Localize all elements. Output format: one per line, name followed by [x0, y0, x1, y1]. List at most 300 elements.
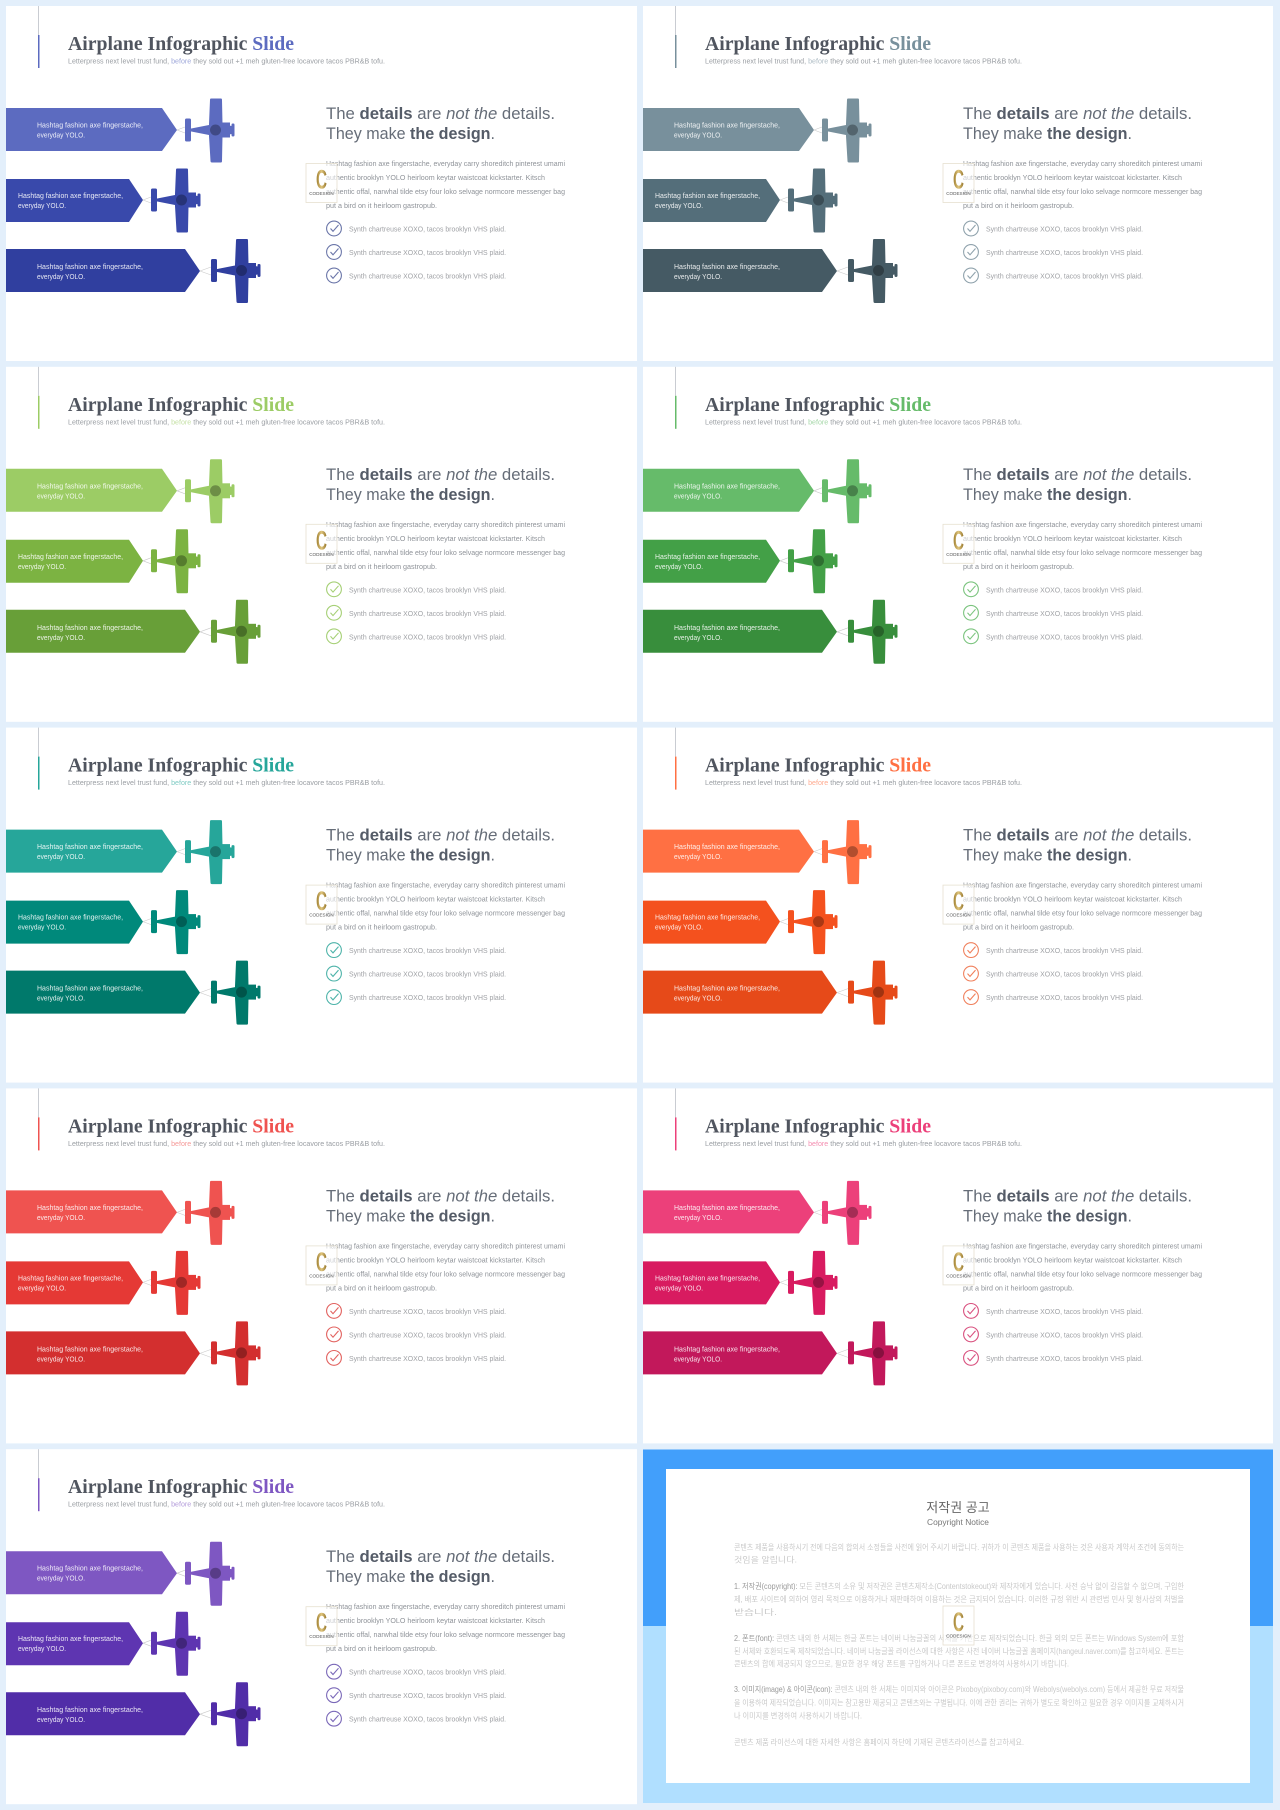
- body text: put a bird on it heirloom gastropub.: [326, 201, 437, 210]
- arrow label 1: Hashtag fashion axe fingerstache,: [37, 120, 143, 130]
- arrow label 1: [643, 830, 814, 873]
- body text: put a bird on it heirloom gastropub.: [963, 562, 1074, 571]
- body text: authentic brooklyn YOLO heirloom keytar waistcoat kickstarter. Kitsch: [326, 1616, 545, 1625]
- body text: Hashtag fashion axe fingerstache, everyday carry shoreditch pinterest umami: [963, 1241, 1202, 1250]
- arrow label 3: [6, 1331, 200, 1374]
- heading: The details are not the details.: [326, 826, 555, 845]
- check list: [327, 1304, 506, 1365]
- heading: [963, 465, 1192, 504]
- watermark: C: [316, 1247, 327, 1277]
- arrow label 1: Hashtag fashion axe fingerstache,: [37, 1203, 143, 1212]
- body text: authentic brooklyn YOLO heirloom keytar waistcoat kickstarter. Kitsch: [963, 895, 1182, 904]
- airplane 1: [814, 1181, 872, 1245]
- check list: Synth chartreuse XOXO, tacos brooklyn VHS plaid.: [349, 248, 506, 257]
- arrow label 1: Hashtag fashion axe fingerstache,: [674, 481, 780, 490]
- arrow label 1: everyday YOLO.: [37, 1574, 85, 1583]
- heading: The details are not the details.: [326, 1186, 555, 1205]
- check list: Synth chartreuse XOXO, tacos brooklyn VHS plaid.: [986, 1354, 1143, 1363]
- heading: They make the design.: [963, 1206, 1132, 1225]
- body text: Hashtag fashion axe fingerstache, everyday carry shoreditch pinterest umami: [326, 881, 565, 890]
- check list: Synth chartreuse XOXO, tacos brooklyn VHS plaid.: [986, 1330, 1143, 1339]
- heading: The details are not the details.: [326, 465, 555, 484]
- check list: Synth chartreuse XOXO, tacos brooklyn VHS plaid.: [349, 1354, 506, 1363]
- title: Airplane Infographic Slide: [68, 755, 294, 777]
- accent bar: [675, 6, 676, 68]
- body text: put a bird on it heirloom gastropub.: [963, 1283, 1074, 1292]
- panel: copyright notice: [643, 1450, 1273, 1803]
- panel: indigo slide: [6, 6, 637, 361]
- copyright heading: Copyright Notice: [927, 1517, 989, 1527]
- arrow label 1: Hashtag fashion axe fingerstache,: [674, 120, 780, 130]
- subtitle: Letterpress next level trust fund, before they sold out +1 meh gluten-free locavore tacos PBR&B tofu.: [68, 1139, 385, 1148]
- accent bar: [675, 1088, 676, 1150]
- arrow label 1: [6, 1190, 177, 1233]
- arrow label 3: Hashtag fashion axe fingerstache,: [674, 262, 780, 271]
- subtitle: Letterpress next level trust fund, before they sold out +1 meh gluten-free locavore tacos PBR&B tofu.: [68, 778, 385, 787]
- check list: Synth chartreuse XOXO, tacos brooklyn VHS plaid.: [986, 585, 1143, 594]
- body text: authentic brooklyn YOLO heirloom keytar waistcoat kickstarter. Kitsch: [326, 895, 545, 904]
- panel: pink slide: [643, 1088, 1273, 1443]
- arrow label 1: everyday YOLO.: [674, 130, 722, 140]
- heading: They make the design.: [326, 124, 495, 143]
- title: Airplane Infographic Slide: [705, 33, 931, 55]
- airplane 3: [200, 1321, 260, 1385]
- body text: [326, 1602, 565, 1653]
- copyright clause 3: 을 이용하여 제작되었습니다. 이미지는 참고용만 제공되고 콘텐츠와는 구별됩니다. 이에 관한 권리는 귀하가 별도로 확인하고 필요한 경우 이미지를 교체하시거: [734, 1698, 1184, 1708]
- watermark: [943, 1606, 974, 1645]
- check list: [327, 221, 506, 283]
- panel: green slide: [643, 367, 1273, 722]
- heading: [326, 104, 555, 143]
- heading: [326, 1186, 555, 1225]
- copyright intro: 콘텐츠 제품을 사용하시기 전에 다음의 합의서 소정들을 사전에 읽어 주시기 바랍니다. 귀하가 이 콘텐츠 제품을 사용하는 것은 사용자 계약서 조건에 동의하는: [734, 1542, 1184, 1552]
- panel: blue grey slide: [643, 6, 1273, 361]
- body text: put a bird on it heirloom gastropub.: [963, 923, 1074, 932]
- arrow label 2: [643, 179, 780, 222]
- heading: [963, 104, 1192, 143]
- panel: red slide: [6, 1088, 637, 1443]
- copyright intro: 것임을 알립니다.: [734, 1554, 797, 1564]
- watermark: CODESIGN: [309, 191, 334, 196]
- heading: The details are not the details.: [963, 826, 1192, 845]
- arrow label 3: everyday YOLO.: [37, 272, 85, 281]
- check list: Synth chartreuse XOXO, tacos brooklyn VHS plaid.: [986, 248, 1143, 257]
- copyright clause 1: 받습니다.: [734, 1607, 777, 1617]
- check list: [327, 943, 506, 1004]
- arrow label 1: everyday YOLO.: [674, 491, 722, 500]
- airplane 1: [177, 98, 234, 162]
- heading: They make the design.: [963, 485, 1132, 504]
- body text: authentic offal, narwhal tilde etsy four loko selvage normcore messenger bag: [326, 187, 565, 196]
- watermark: CODESIGN: [946, 552, 971, 557]
- heading: They make the design.: [963, 846, 1132, 865]
- airplane 3: [837, 1321, 898, 1385]
- accent bar: [38, 1449, 40, 1511]
- airplane 2: [143, 1612, 200, 1676]
- airplane 1: [177, 1181, 234, 1245]
- panel: light green slide: [6, 367, 637, 722]
- arrow label 1: Hashtag fashion axe fingerstache,: [37, 842, 143, 851]
- arrow label 2: everyday YOLO.: [18, 562, 66, 571]
- check list: [964, 943, 1143, 1004]
- arrow label 2: [6, 179, 143, 222]
- arrow label 2: everyday YOLO.: [655, 201, 703, 210]
- check list: Synth chartreuse XOXO, tacos brooklyn VHS plaid.: [986, 609, 1143, 618]
- heading: The details are not the details.: [963, 104, 1192, 123]
- arrow label 2: [6, 1622, 143, 1665]
- arrow label 2: [643, 1261, 780, 1304]
- body text: put a bird on it heirloom gastropub.: [326, 1283, 437, 1292]
- copyright heading: 저작권 공고: [926, 1500, 990, 1515]
- arrow label 1: Hashtag fashion axe fingerstache,: [37, 1564, 143, 1573]
- check list: Synth chartreuse XOXO, tacos brooklyn VHS plaid.: [349, 946, 506, 955]
- body text: authentic offal, narwhal tilde etsy four loko selvage normcore messenger bag: [326, 1269, 565, 1278]
- heading: They make the design.: [963, 124, 1132, 143]
- title: Airplane Infographic Slide: [68, 1115, 294, 1137]
- subtitle: Letterpress next level trust fund, before they sold out +1 meh gluten-free locavore tacos PBR&B tofu.: [68, 417, 385, 426]
- airplane 1: [177, 820, 234, 884]
- arrow label 3: [643, 1331, 837, 1374]
- heading: The details are not the details.: [963, 1186, 1192, 1205]
- body text: authentic brooklyn YOLO heirloom keytar waistcoat kickstarter. Kitsch: [326, 1255, 545, 1264]
- copyright clause 2: 콘텐츠의 합에 제공되지 않으므로, 필요한 경우 해당 폰트를 구입하거나 다른 폰트로 변경하여 사용하시기 바랍니다.: [734, 1658, 1069, 1668]
- watermark: C: [953, 164, 964, 194]
- watermark: CODESIGN: [309, 1273, 334, 1278]
- watermark: C: [953, 886, 964, 916]
- body text: [963, 881, 1202, 932]
- arrow label 1: Hashtag fashion axe fingerstache,: [674, 842, 780, 851]
- arrow label 2: Hashtag fashion axe fingerstache,: [655, 191, 760, 200]
- heading: [326, 1547, 555, 1586]
- arrow label 2: [643, 901, 780, 944]
- airplane 1: [814, 459, 872, 523]
- panel: teal slide: [6, 728, 637, 1083]
- arrow label 3: everyday YOLO.: [674, 1354, 722, 1363]
- check list: Synth chartreuse XOXO, tacos brooklyn VHS plaid.: [349, 1668, 506, 1677]
- subtitle: Letterpress next level trust fund, before they sold out +1 meh gluten-free locavore tacos PBR&B tofu.: [705, 778, 1022, 787]
- arrow label 2: Hashtag fashion axe fingerstache,: [655, 552, 760, 561]
- subtitle: Letterpress next level trust fund, before they sold out +1 meh gluten-free locavore tacos PBR&B tofu.: [705, 56, 1022, 66]
- airplane 3: [200, 600, 260, 664]
- airplane 1: [814, 98, 872, 162]
- arrow label 2: Hashtag fashion axe fingerstache,: [18, 552, 123, 561]
- body text: Hashtag fashion axe fingerstache, everyday carry shoreditch pinterest umami: [326, 1602, 565, 1611]
- copyright clause 1: 1. 저작권(copyright): 모든 콘텐츠의 소유 및 저작권은 콘텐츠제작소(Contentstokeout)와 제작자에게 있습니다. 사전 승낙 없이 갈음할 수 없으며, 구입한: [734, 1581, 1185, 1591]
- watermark: [943, 524, 974, 563]
- watermark: C: [316, 886, 327, 916]
- body text: Hashtag fashion axe fingerstache, everyday carry shoreditch pinterest umami: [326, 1241, 565, 1250]
- copyright heading: [926, 1500, 990, 1527]
- arrow label 3: Hashtag fashion axe fingerstache,: [674, 623, 780, 632]
- check list: Synth chartreuse XOXO, tacos brooklyn VHS plaid.: [349, 632, 506, 641]
- title: Airplane Infographic Slide: [68, 1476, 294, 1498]
- arrow label 2: [6, 1261, 143, 1304]
- watermark: CODESIGN: [309, 1634, 334, 1639]
- check list: [964, 1304, 1143, 1365]
- subtitle: Letterpress next level trust fund, before they sold out +1 meh gluten-free locavore tacos PBR&B tofu.: [705, 417, 1022, 426]
- heading: They make the design.: [326, 485, 495, 504]
- arrow label 2: everyday YOLO.: [655, 1283, 703, 1292]
- arrow label 3: Hashtag fashion axe fingerstache,: [37, 984, 143, 993]
- arrow label 3: [643, 249, 837, 292]
- arrow label 1: [6, 469, 177, 512]
- arrow label 3: [643, 971, 837, 1014]
- arrow label 1: everyday YOLO.: [674, 852, 722, 861]
- watermark: [306, 1607, 337, 1646]
- body text: authentic brooklyn YOLO heirloom keytar waistcoat kickstarter. Kitsch: [326, 173, 545, 182]
- airplane 3: [837, 239, 898, 303]
- heading: [963, 1186, 1192, 1225]
- check list: Synth chartreuse XOXO, tacos brooklyn VHS plaid.: [349, 1330, 506, 1339]
- airplane 3: [200, 961, 260, 1025]
- body text: authentic brooklyn YOLO heirloom keytar waistcoat kickstarter. Kitsch: [963, 1255, 1182, 1264]
- arrow label 3: everyday YOLO.: [37, 633, 85, 642]
- arrow label 3: everyday YOLO.: [37, 1354, 85, 1363]
- check list: Synth chartreuse XOXO, tacos brooklyn VHS plaid.: [349, 272, 506, 280]
- arrow label 3: Hashtag fashion axe fingerstache,: [674, 1344, 780, 1353]
- watermark: CODESIGN: [946, 913, 971, 918]
- watermark: CODESIGN: [946, 191, 971, 196]
- watermark: C: [316, 164, 327, 194]
- check list: [327, 582, 506, 644]
- body text: authentic offal, narwhal tilde etsy four loko selvage normcore messenger bag: [326, 548, 565, 557]
- title: Airplane Infographic Slide: [68, 394, 294, 416]
- check list: [964, 221, 1143, 283]
- copyright clause 2: [734, 1633, 1185, 1668]
- arrow label 2: [6, 901, 143, 944]
- body text: authentic offal, narwhal tilde etsy four loko selvage normcore messenger bag: [963, 548, 1202, 557]
- airplane 3: [200, 1682, 260, 1746]
- subtitle: Letterpress next level trust fund, before they sold out +1 meh gluten-free locavore tacos PBR&B tofu.: [705, 1139, 1022, 1148]
- accent bar: [38, 367, 40, 429]
- watermark: C: [316, 1608, 327, 1638]
- arrow label 3: everyday YOLO.: [37, 1715, 85, 1724]
- arrow label 2: everyday YOLO.: [655, 923, 703, 932]
- airplane 2: [143, 529, 200, 593]
- body text: Hashtag fashion axe fingerstache, everyday carry shoreditch pinterest umami: [326, 520, 565, 529]
- arrow label 1: everyday YOLO.: [674, 1213, 722, 1222]
- arrow label 2: Hashtag fashion axe fingerstache,: [18, 191, 123, 200]
- arrow label 2: Hashtag fashion axe fingerstache,: [18, 1634, 123, 1643]
- title: Airplane Infographic Slide: [68, 33, 294, 55]
- body text: authentic brooklyn YOLO heirloom keytar waistcoat kickstarter. Kitsch: [963, 173, 1182, 182]
- arrow label 2: everyday YOLO.: [18, 923, 66, 932]
- body text: [963, 520, 1202, 571]
- arrow label 1: Hashtag fashion axe fingerstache,: [37, 481, 143, 490]
- arrow label 2: Hashtag fashion axe fingerstache,: [655, 1273, 760, 1282]
- body text: Hashtag fashion axe fingerstache, everyday carry shoreditch pinterest umami: [963, 881, 1202, 890]
- watermark: [306, 1246, 337, 1285]
- watermark: C: [316, 525, 327, 555]
- panel: deep orange slide: [643, 728, 1273, 1083]
- arrow label 3: [6, 1692, 200, 1735]
- airplane 3: [837, 600, 898, 664]
- heading: They make the design.: [326, 1567, 495, 1586]
- check list: Synth chartreuse XOXO, tacos brooklyn VHS plaid.: [349, 585, 506, 594]
- body text: put a bird on it heirloom gastropub.: [326, 1644, 437, 1653]
- check list: Synth chartreuse XOXO, tacos brooklyn VHS plaid.: [349, 224, 506, 234]
- title: Airplane Infographic Slide: [705, 394, 931, 416]
- arrow label 3: Hashtag fashion axe fingerstache,: [37, 623, 143, 632]
- check list: Synth chartreuse XOXO, tacos brooklyn VHS plaid.: [986, 632, 1143, 641]
- arrow label 3: everyday YOLO.: [37, 994, 85, 1003]
- heading: The details are not the details.: [326, 1547, 555, 1566]
- heading: They make the design.: [326, 1206, 495, 1225]
- arrow label 3: [6, 971, 200, 1014]
- arrow label 3: [6, 610, 200, 653]
- copyright clause 2: 2. 폰트(font): 콘텐츠 내의 한 서체는 한글 폰트는 네이버 나눔글꼴의 서체를 기반으로 제작되었습니다. 한글 외의 모든 폰트는 Windows System에 포함: [734, 1633, 1185, 1643]
- check list: [327, 1664, 506, 1726]
- accent bar: [38, 6, 40, 68]
- body text: Hashtag fashion axe fingerstache, everyday carry shoreditch pinterest umami: [963, 520, 1202, 529]
- body text: [963, 159, 1202, 210]
- arrow label 3: Hashtag fashion axe fingerstache,: [37, 1344, 143, 1353]
- arrow label 1: everyday YOLO.: [37, 852, 85, 861]
- heading: [326, 465, 555, 504]
- copyright closing: 콘텐츠 제품 라이선스에 대한 자세한 사항은 홈페이지 하단에 기재된 콘텐츠라이선스를 참고하세요.: [734, 1737, 1024, 1747]
- watermark: C: [953, 525, 964, 555]
- check list: Synth chartreuse XOXO, tacos brooklyn VHS plaid.: [986, 272, 1143, 280]
- body text: [326, 881, 565, 932]
- check list: Synth chartreuse XOXO, tacos brooklyn VHS plaid.: [349, 609, 506, 618]
- arrow label 1: [6, 108, 177, 151]
- check list: Synth chartreuse XOXO, tacos brooklyn VHS plaid.: [986, 224, 1143, 234]
- arrow label 3: [643, 610, 837, 653]
- arrow label 2: everyday YOLO.: [655, 562, 703, 571]
- body text: authentic offal, narwhal tilde etsy four loko selvage normcore messenger bag: [326, 909, 565, 918]
- body text: authentic offal, narwhal tilde etsy four loko selvage normcore messenger bag: [963, 1269, 1202, 1278]
- accent bar: [38, 1088, 40, 1150]
- arrow label 2: [643, 540, 780, 583]
- arrow label 3: everyday YOLO.: [674, 633, 722, 642]
- body text: authentic offal, narwhal tilde etsy four loko selvage normcore messenger bag: [326, 1630, 565, 1639]
- watermark: [306, 885, 337, 924]
- watermark: C: [953, 1607, 964, 1637]
- airplane 2: [143, 1251, 200, 1315]
- watermark: C: [953, 1247, 964, 1277]
- arrow label 3: everyday YOLO.: [674, 272, 722, 281]
- watermark: CODESIGN: [946, 1273, 971, 1278]
- check list: Synth chartreuse XOXO, tacos brooklyn VHS plaid.: [349, 970, 506, 979]
- copyright clause 3: [734, 1684, 1184, 1720]
- airplane 3: [200, 239, 260, 303]
- arrow label 1: [6, 830, 177, 873]
- airplane 1: [177, 1542, 234, 1606]
- check list: Synth chartreuse XOXO, tacos brooklyn VHS plaid.: [986, 946, 1143, 955]
- airplane 3: [837, 961, 898, 1025]
- heading: The details are not the details.: [963, 465, 1192, 484]
- arrow label 2: everyday YOLO.: [18, 1283, 66, 1292]
- watermark: [306, 164, 337, 202]
- accent bar: [675, 367, 676, 429]
- arrow label 2: everyday YOLO.: [18, 201, 66, 210]
- heading: [963, 826, 1192, 865]
- check list: Synth chartreuse XOXO, tacos brooklyn VHS plaid.: [986, 1307, 1143, 1316]
- body text: authentic offal, narwhal tilde etsy four loko selvage normcore messenger bag: [963, 909, 1202, 918]
- panel: deep purple slide: [6, 1449, 637, 1804]
- airplane 1: [814, 820, 872, 884]
- watermark: [943, 1246, 974, 1285]
- check list: [964, 582, 1143, 644]
- check list: Synth chartreuse XOXO, tacos brooklyn VHS plaid.: [349, 1307, 506, 1316]
- body text: [326, 520, 565, 571]
- accent bar: [675, 728, 676, 790]
- copyright clause 1: 제, 배포 사이트에 의하여 영리 목적으로 이용하거나 재판매하여 이용하는 것은 금지되어 있습니다. 이러한 규정 위반 시 관련법 민사 및 형사상의 처벌을: [734, 1594, 1184, 1604]
- title: Airplane Infographic Slide: [705, 1115, 931, 1137]
- body text: [326, 159, 565, 210]
- copyright intro: [734, 1542, 1184, 1564]
- heading: They make the design.: [326, 846, 495, 865]
- arrow label 3: Hashtag fashion axe fingerstache,: [37, 1705, 143, 1714]
- body text: Hashtag fashion axe fingerstache, everyday carry shoreditch pinterest umami: [326, 159, 565, 168]
- check list: Synth chartreuse XOXO, tacos brooklyn VHS plaid.: [986, 970, 1143, 979]
- heading: The details are not the details.: [326, 104, 555, 123]
- arrow label 2: [6, 540, 143, 583]
- arrow label 2: everyday YOLO.: [18, 1644, 66, 1653]
- copyright clause 3: 나 이미지를 변경하여 사용하시기 바랍니다.: [734, 1710, 862, 1720]
- arrow label 2: Hashtag fashion axe fingerstache,: [18, 913, 123, 922]
- copyright clause 1: [734, 1581, 1185, 1617]
- check list: Synth chartreuse XOXO, tacos brooklyn VHS plaid.: [349, 1715, 506, 1724]
- watermark: [306, 524, 337, 563]
- body text: authentic offal, narwhal tilde etsy four loko selvage normcore messenger bag: [963, 187, 1202, 196]
- body text: put a bird on it heirloom gastropub.: [963, 201, 1074, 210]
- body text: Hashtag fashion axe fingerstache, everyday carry shoreditch pinterest umami: [963, 159, 1202, 168]
- airplane 1: [177, 459, 234, 523]
- airplane 2: [780, 529, 838, 593]
- body text: put a bird on it heirloom gastropub.: [326, 923, 437, 932]
- arrow label 1: [643, 1190, 814, 1233]
- body text: authentic brooklyn YOLO heirloom keytar waistcoat kickstarter. Kitsch: [326, 534, 545, 543]
- arrow label 1: [643, 108, 814, 151]
- body text: [963, 1241, 1202, 1292]
- copyright clause 3: 3. 이미지(image) & 아이콘(icon): 콘텐츠 내의 한 서체는 이미지와 아이콘은 Pixoboy(pixoboy.com)와 Webolys(webolys.com) 등에서 제공한 무료 저작물: [734, 1684, 1184, 1694]
- body text: [326, 1241, 565, 1292]
- arrow label 2: Hashtag fashion axe fingerstache,: [18, 1273, 123, 1282]
- copyright clause 2: 된 서체와 호환되도록 제작되었습니다. 네이버 나눔글꼴 라이선스에 대한 사항은 사전 네이버 나눔글꼴 홈페이지(hangeul.naver.com)를 참고하세요. 폰트는: [734, 1646, 1184, 1656]
- arrow label 3: Hashtag fashion axe fingerstache,: [37, 262, 143, 271]
- arrow label 1: everyday YOLO.: [37, 1213, 85, 1222]
- watermark: CODESIGN: [946, 1634, 971, 1638]
- arrow label 3: Hashtag fashion axe fingerstache,: [674, 984, 780, 993]
- check list: Synth chartreuse XOXO, tacos brooklyn VHS plaid.: [349, 1691, 506, 1700]
- arrow label 1: [6, 1551, 177, 1594]
- arrow label 3: [6, 249, 200, 292]
- airplane 2: [143, 890, 200, 954]
- arrow label 1: everyday YOLO.: [37, 130, 85, 140]
- airplane 2: [780, 890, 838, 954]
- watermark: [943, 164, 974, 202]
- arrow label 1: [643, 469, 814, 512]
- airplane 2: [780, 168, 838, 232]
- heading: [326, 826, 555, 865]
- accent bar: [38, 728, 40, 790]
- subtitle: Letterpress next level trust fund, before they sold out +1 meh gluten-free locavore tacos PBR&B tofu.: [68, 56, 385, 66]
- arrow label 1: Hashtag fashion axe fingerstache,: [674, 1203, 780, 1212]
- watermark: [943, 885, 974, 924]
- check list: Synth chartreuse XOXO, tacos brooklyn VHS plaid.: [349, 993, 506, 1002]
- airplane 2: [143, 168, 200, 232]
- body text: put a bird on it heirloom gastropub.: [326, 562, 437, 571]
- body text: authentic brooklyn YOLO heirloom keytar waistcoat kickstarter. Kitsch: [963, 534, 1182, 543]
- check list: Synth chartreuse XOXO, tacos brooklyn VHS plaid.: [986, 993, 1143, 1002]
- arrow label 3: everyday YOLO.: [674, 994, 722, 1003]
- subtitle: Letterpress next level trust fund, before they sold out +1 meh gluten-free locavore tacos PBR&B tofu.: [68, 1500, 385, 1509]
- airplane 2: [780, 1251, 838, 1315]
- arrow label 2: Hashtag fashion axe fingerstache,: [655, 913, 760, 922]
- arrow label 1: everyday YOLO.: [37, 491, 85, 500]
- watermark: CODESIGN: [309, 552, 334, 557]
